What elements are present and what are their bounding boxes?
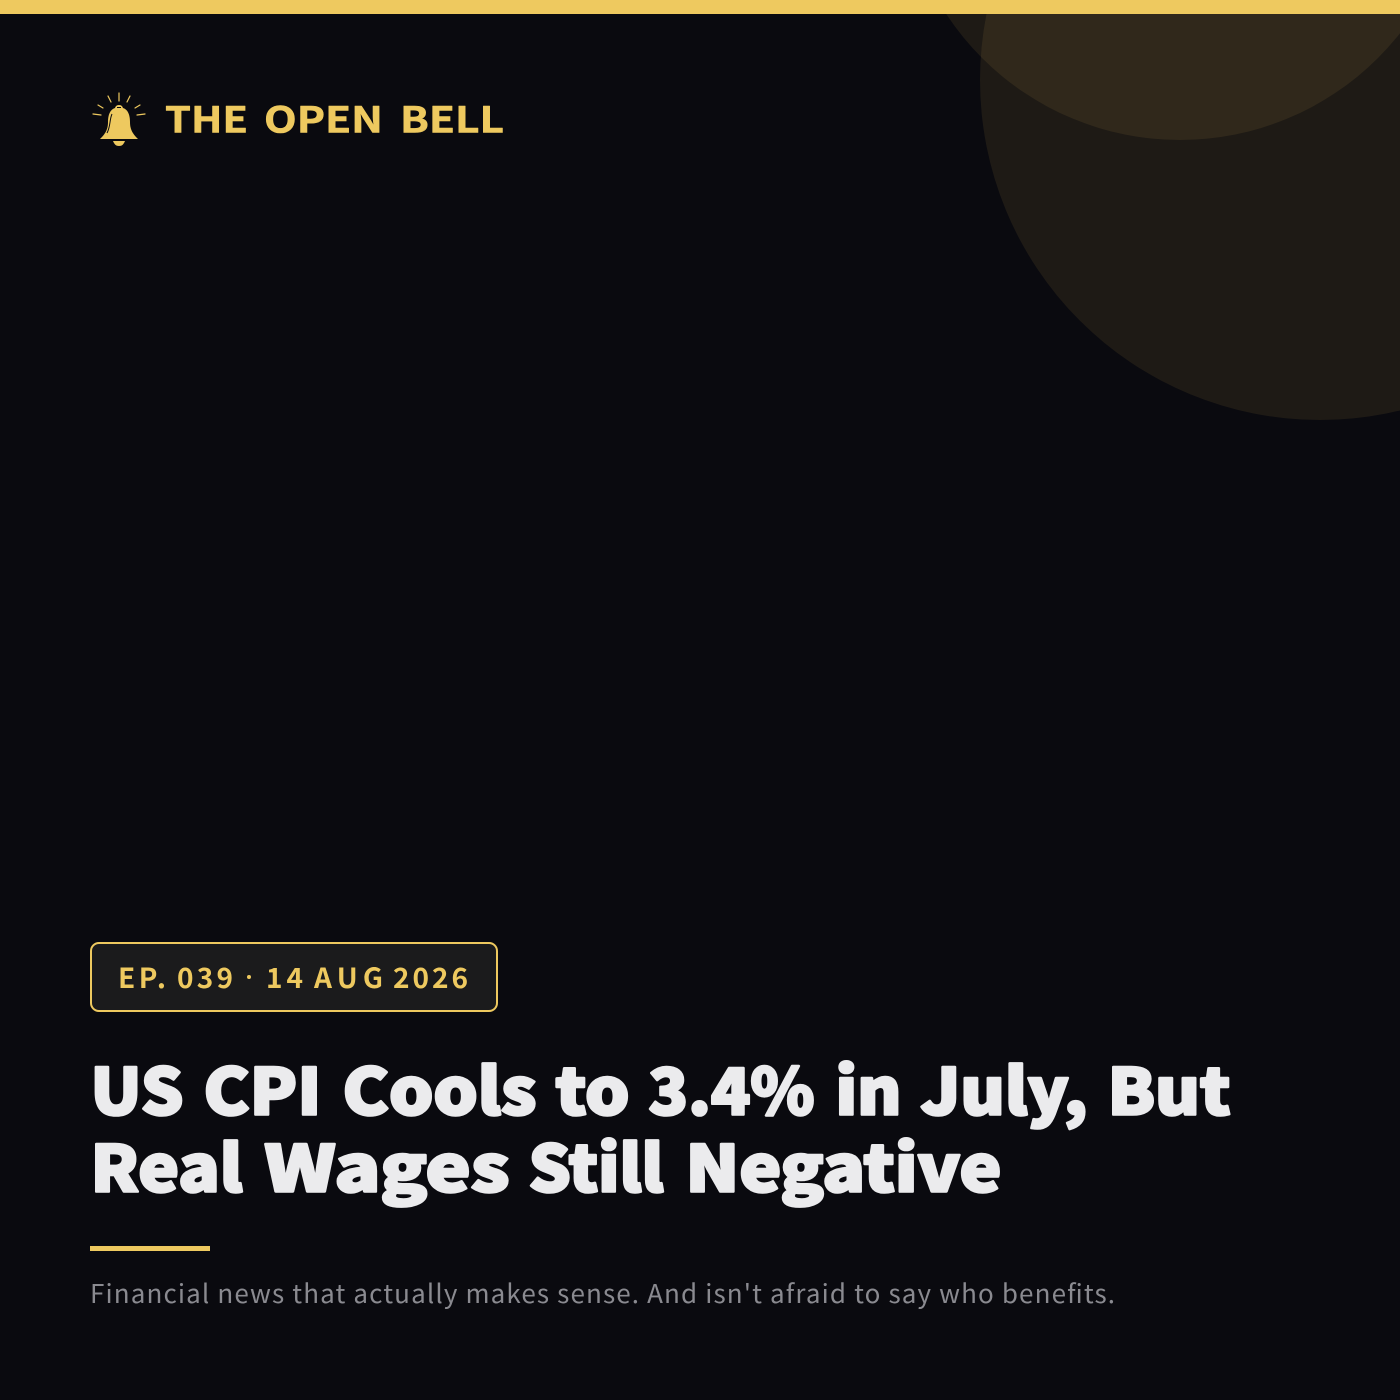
headline: Negative <box>686 1118 1002 1210</box>
episode badge: AUG <box>313 957 383 997</box>
accent rule <box>90 1246 210 1251</box>
headline: Wages <box>264 1118 510 1210</box>
episode badge <box>91 943 497 1011</box>
headline: in <box>836 1042 902 1134</box>
brand name <box>165 92 504 144</box>
brand name: THE <box>165 92 248 144</box>
small decorative circle <box>900 0 1400 140</box>
brand name: BELL <box>400 92 504 144</box>
brand name: OPEN <box>264 92 383 144</box>
episode badge: 039 <box>177 957 233 997</box>
headline: But <box>1108 1042 1230 1134</box>
large decorative circle <box>980 0 1400 420</box>
tagline: Financial news that actually makes sense. And isn't afraid to say who benefits. <box>90 1274 1115 1311</box>
headline: CPI <box>204 1042 322 1134</box>
icon: bell <box>93 93 145 146</box>
headline: US <box>90 1042 184 1134</box>
episode badge: 14 <box>266 957 303 997</box>
headline: to <box>556 1042 630 1134</box>
headline: Real <box>90 1118 242 1210</box>
brand logo <box>93 92 504 146</box>
episode badge: 2026 <box>393 957 468 997</box>
top accent bar <box>0 0 1400 14</box>
headline: Cools <box>342 1042 536 1134</box>
headline: Still <box>528 1118 664 1210</box>
episode badge: EP. <box>118 957 166 997</box>
headline: 3.4% <box>648 1042 814 1134</box>
headline: July, <box>920 1042 1088 1134</box>
headline <box>90 1042 1230 1210</box>
